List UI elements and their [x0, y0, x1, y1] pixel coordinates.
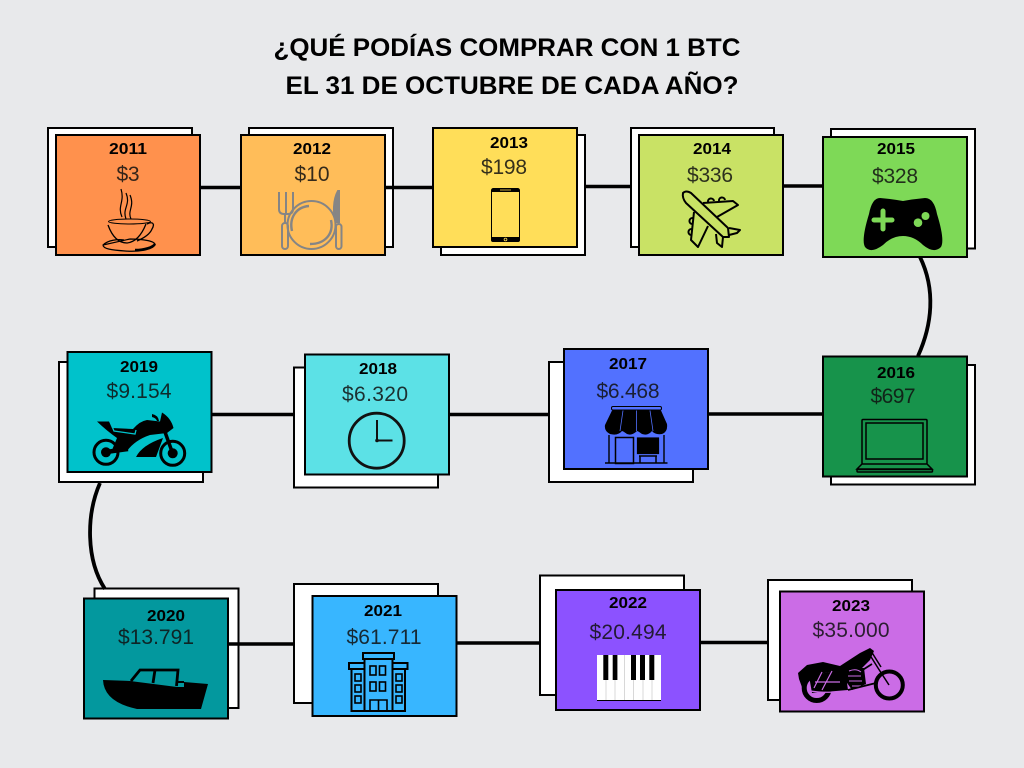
connector lines [90, 186, 930, 644]
card 2021: apartment building [294, 584, 456, 716]
card 2018: clock: $6.320 [342, 383, 408, 406]
card 2018: clock: 2018 [359, 361, 397, 378]
card 2015: game controller: $328 [872, 165, 918, 188]
title: EL 31 DE OCTUBRE DE CADA AÑO? [286, 70, 738, 100]
card 2011: coffee: $3 [116, 163, 140, 186]
card 2019: sport motorcycle [59, 352, 212, 482]
icon: laptop [857, 420, 932, 472]
icon: piano keys [597, 655, 661, 700]
card 2021: apartment building: 2021 [364, 603, 402, 620]
card 2023: cruiser motorcycle [768, 580, 924, 712]
card 2018: clock [294, 354, 449, 488]
card 2014: airplane: 2014 [693, 141, 731, 158]
card 2019: sport motorcycle: $9.154 [106, 380, 172, 403]
card 2014: airplane: $336 [687, 164, 733, 187]
card 2020: boat [84, 588, 238, 718]
card 2021: apartment building: $61.711 [346, 626, 422, 649]
card 2020: boat: $13.791 [118, 626, 194, 649]
card 2013: smartphone: $198 [481, 156, 527, 179]
card 2019: sport motorcycle: 2019 [120, 359, 158, 376]
card 2016: laptop: $697 [870, 385, 916, 408]
icon: game controller [864, 198, 942, 250]
card 2013: smartphone [433, 128, 585, 255]
card 2015: game controller: 2015 [877, 141, 915, 158]
card 2020: boat: 2020 [147, 608, 185, 625]
icon: coffee cup [103, 189, 155, 251]
card 2014: airplane [631, 128, 783, 255]
icon: apartment building [349, 653, 408, 711]
card 2015: game controller [823, 129, 975, 257]
card 2022: piano keys: $20.494 [590, 621, 667, 644]
card 2023: cruiser motorcycle: 2023 [832, 598, 870, 615]
icon: storefront [605, 406, 668, 464]
card 2017: storefront: $6.468 [596, 380, 660, 403]
title: ¿QUÉ PODÍAS COMPRAR CON 1 BTC [274, 33, 740, 62]
card 2012: dinner plate: $10 [294, 163, 330, 186]
card 2022: piano keys [540, 576, 700, 710]
icon: plate and cutlery [279, 191, 342, 249]
card 2017: storefront: 2017 [609, 356, 647, 373]
card 2023: cruiser motorcycle: $35.000 [812, 619, 890, 642]
card 2011: coffee: 2011 [109, 141, 147, 158]
card 2011: coffee [48, 128, 200, 255]
card 2016: laptop: 2016 [877, 365, 915, 382]
card 2012: dinner plate: 2012 [293, 141, 331, 158]
card 2013: smartphone: 2013 [490, 135, 528, 152]
icon: airplane [683, 192, 740, 247]
card 2012: dinner plate [241, 128, 393, 255]
icon: smartphone [491, 188, 520, 242]
card 2016: laptop [823, 356, 975, 484]
icon: cruiser motorcycle [798, 648, 903, 700]
title [274, 33, 740, 100]
icon: boat [103, 670, 208, 709]
icon: sport motorcycle [94, 412, 185, 465]
icon: clock [349, 413, 404, 468]
card 2022: piano keys: 2022 [609, 595, 647, 612]
card 2017: storefront [549, 349, 708, 482]
